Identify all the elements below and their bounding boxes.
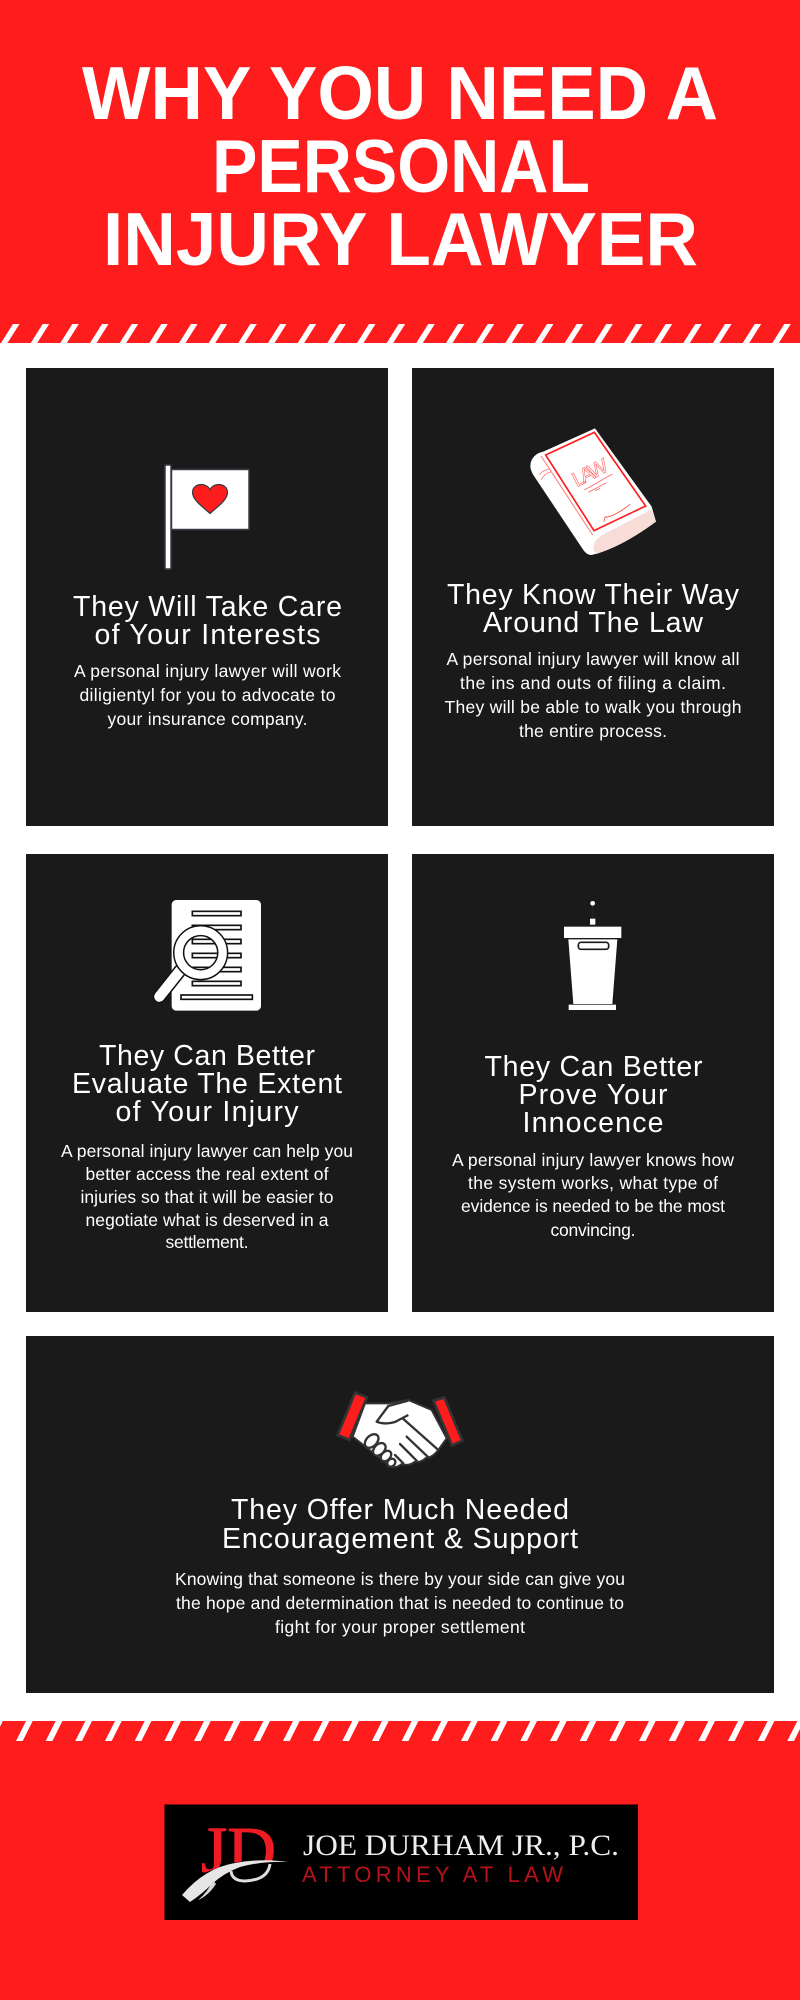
body text: your insurance company. [108,709,308,729]
body text: the hope and determination that is needed to continue to [176,1593,624,1613]
heading [484,1051,703,1139]
title: INJURY LAWYER [103,197,698,281]
heading [73,591,342,651]
heading [222,1494,578,1555]
body text: better access the real extent of [86,1164,329,1184]
heading: Innocence [522,1107,664,1139]
heading: Evaluate The Extent [72,1068,342,1100]
body text: Knowing that someone is there by your side can give you [175,1569,625,1589]
logo mark: JD swoosh [182,1814,288,1902]
footer band [0,1721,800,2000]
body text: They will be able to walk you through [444,697,742,717]
header band [0,0,800,343]
heading: Encouragement & Support [222,1523,578,1555]
heading: They Will Take Care [73,591,342,623]
heading: Around The Law [483,607,703,639]
title [82,51,718,281]
body text [444,649,742,741]
heading: They Know Their Way [447,579,740,611]
body text: diligientyl for you to advocate to [80,685,336,705]
body text: A personal injury lawyer will work [74,661,341,681]
body text: convincing. [550,1220,636,1240]
body text: A personal injury lawyer will know all [446,649,740,669]
body text: negotiate what is deserved in a [86,1210,329,1230]
body text: the entire process. [519,721,667,741]
heading: They Offer Much Needed [231,1494,569,1526]
body text [452,1150,734,1240]
body text: injuries so that it will be easier to [80,1187,334,1207]
panel: encouragement and support [26,1336,774,1693]
icon: law book: LAW [568,454,613,492]
tagline: ATTORNEY AT LAW [302,1862,563,1887]
body text: settlement. [166,1232,248,1252]
panel: know their way around the law [412,368,774,826]
body text: evidence is needed to be the most [461,1196,725,1216]
panel: prove your innocence [412,854,774,1312]
body text: A personal injury lawyer can help you [61,1141,353,1161]
heading [447,579,740,639]
icon: podium [564,901,621,1010]
logo mark: JD swoosh: JD [201,1814,276,1887]
heading: They Can Better [99,1040,316,1072]
heading [72,1040,342,1128]
body text: fight for your proper settlement [275,1617,525,1637]
body text: the system works, what type of [468,1173,718,1193]
body text [61,1141,353,1252]
heading: of Your Interests [94,619,320,651]
body text [175,1569,625,1637]
icon: law book [530,428,656,555]
icon: handshake [338,1393,462,1468]
title: WHY YOU NEED A [82,51,718,135]
heading: Prove Your [518,1079,668,1111]
body text: the ins and outs of filing a claim. [460,673,726,693]
panel: take care of your interests [26,368,388,826]
body text: A personal injury lawyer knows how [452,1150,734,1170]
icon: document with magnifying glass [159,900,261,1011]
heading: They Can Better [484,1051,703,1083]
panel: evaluate the extent of your injury [26,854,388,1312]
firm name: JOE DURHAM JR., P.C. [303,1829,619,1862]
logo: Joe Durham Jr., P.C. [164,1804,638,1920]
body text [74,661,341,729]
heading: of Your Injury [116,1096,299,1128]
title: PERSONAL [212,124,590,208]
icon: flag with heart [165,465,249,569]
